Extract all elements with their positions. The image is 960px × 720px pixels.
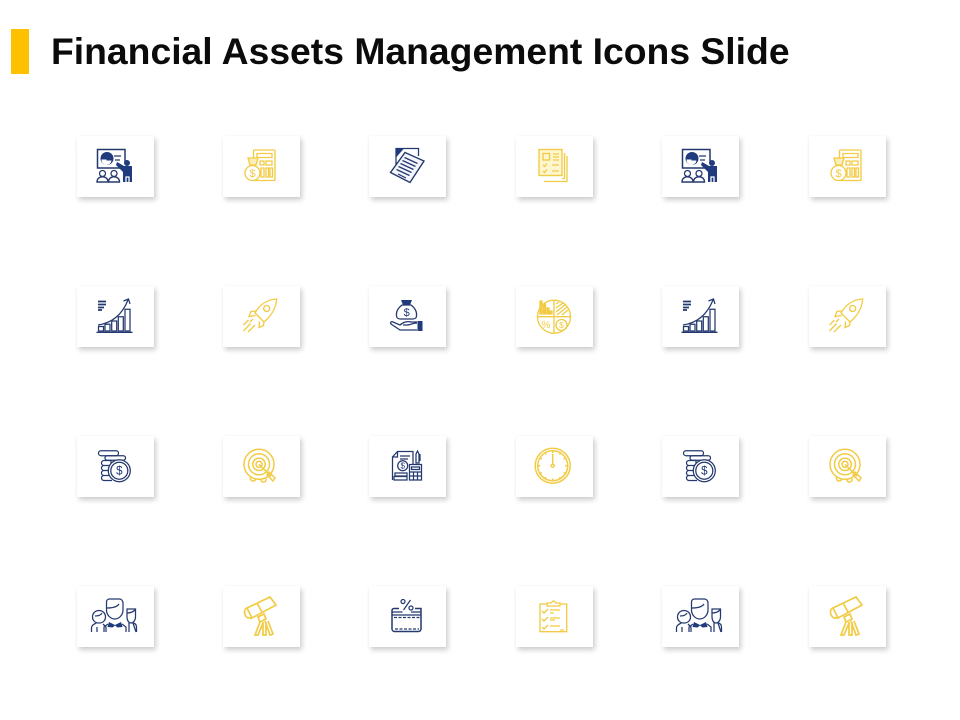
card: growth chart icon (662, 286, 739, 347)
card: finance documents icon (369, 436, 446, 497)
card: money bag and calculator icon (223, 136, 300, 197)
card: telescope icon (223, 586, 300, 647)
card: team icon (662, 586, 739, 647)
card: pie chart icon: $ (559, 320, 564, 330)
card: coin stack icon: $ (701, 466, 708, 478)
card: rocket icon (223, 286, 300, 347)
card: telescope icon (809, 586, 886, 647)
card: coin stack icon (662, 436, 739, 497)
card: coin stack icon: $ (116, 466, 123, 478)
card: checklist pages icon (516, 136, 593, 197)
card: money bag and calculator icon (809, 136, 886, 197)
card: money bag and calculator icon: $ (835, 168, 842, 180)
card: coin stack icon (77, 436, 154, 497)
card: team icon (77, 586, 154, 647)
card: rocket icon (809, 286, 886, 347)
card: money bag and calculator icon: $ (249, 168, 256, 180)
card: money bag in hand icon (369, 286, 446, 347)
card: growth chart icon (77, 286, 154, 347)
card: pie chart icon (516, 286, 593, 347)
card: pie chart icon: % (542, 320, 551, 331)
card: money bag in hand icon: $ (404, 307, 410, 319)
card: presentation icon (77, 136, 154, 197)
card: target icon (223, 436, 300, 497)
card: finance documents icon: $ (400, 462, 405, 470)
accent bar (11, 29, 29, 74)
card: presentation icon (662, 136, 739, 197)
card: clock icon (516, 436, 593, 497)
title: Financial Assets Management Icons Slide (51, 30, 790, 72)
card: clipboard icon (516, 586, 593, 647)
card: target icon (809, 436, 886, 497)
card: wallet with percent icon (369, 586, 446, 647)
card: documents icon (369, 136, 446, 197)
